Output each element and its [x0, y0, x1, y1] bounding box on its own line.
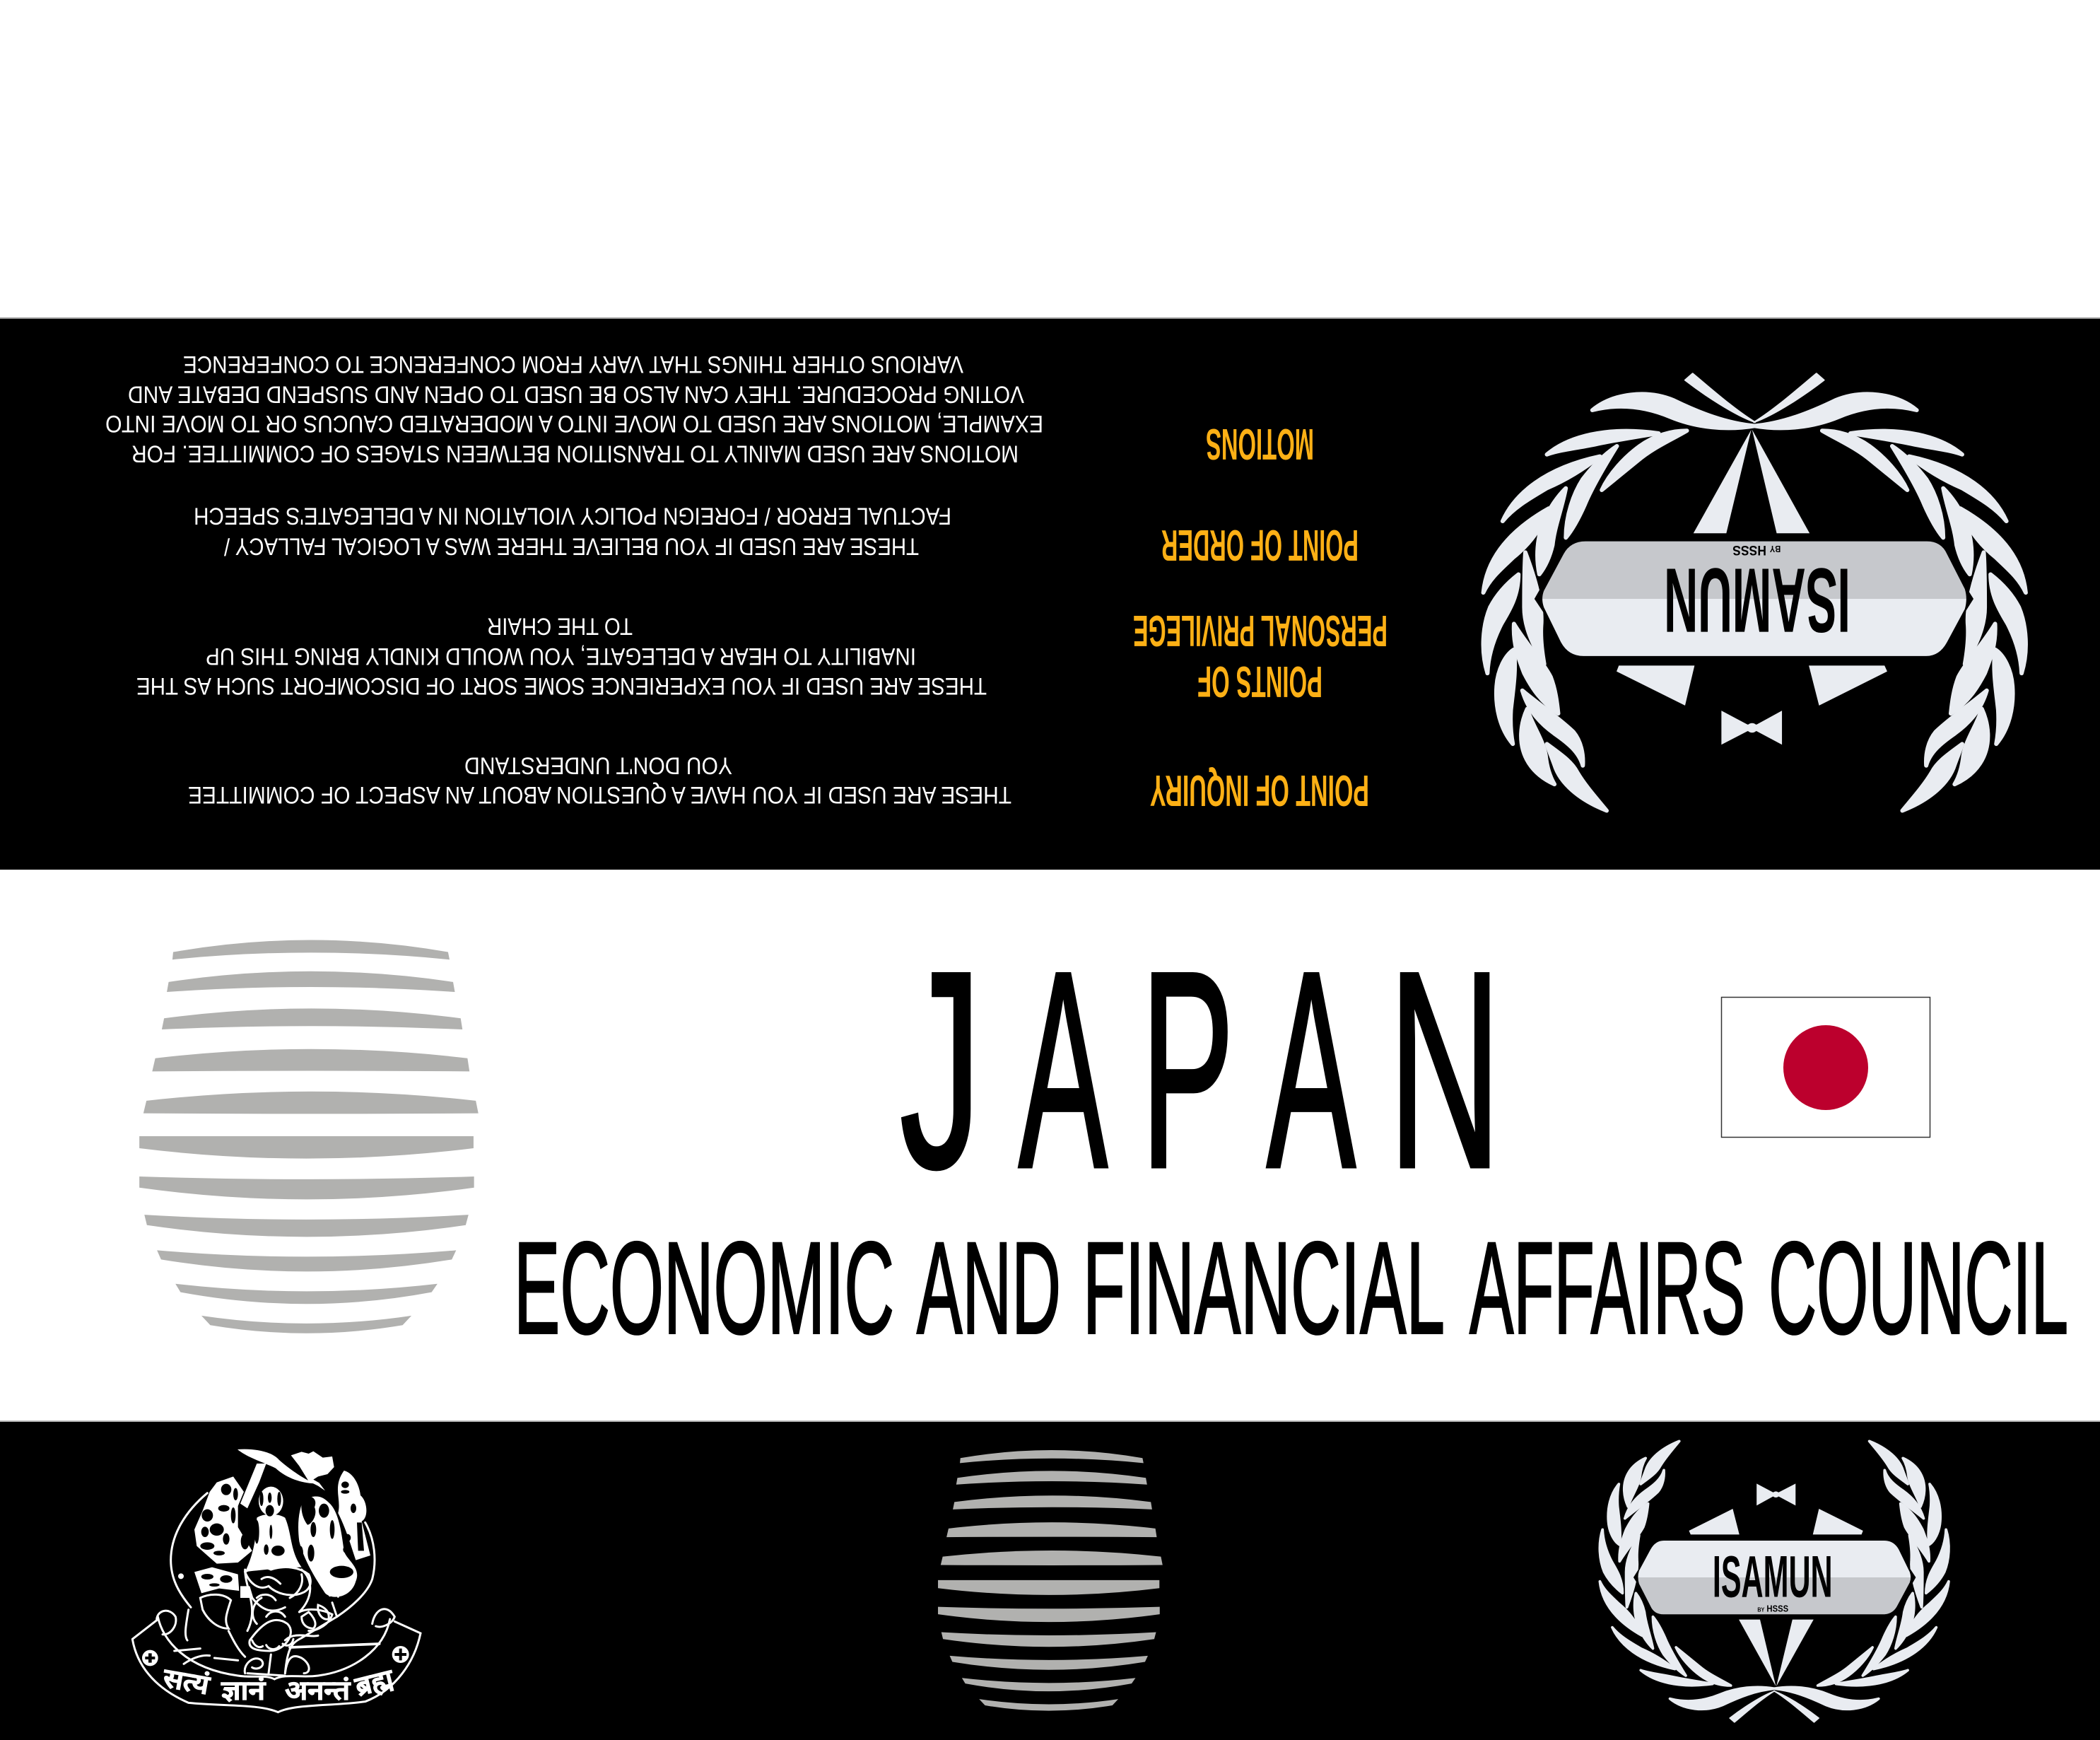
text: motions description: MOTIONS ARE USED MAINLY TO TRANSITION BETWEEN STAGES OF COMMITTEE. FOR: [131, 440, 1019, 467]
icon: UN stripes globe: [139, 940, 479, 1333]
icon: ISAMUN wreath logo: ISAMUN: [1713, 1543, 1833, 1609]
icon: ISAMUN wreath logo, upside down: [1483, 373, 2026, 811]
title: JAPAN: N: [1388, 913, 1501, 1226]
text: crest motto: [160, 1662, 397, 1705]
panel: footer logos band: [0, 1420, 2100, 1740]
text: point of order description: FACTUAL ERROR / FOREIGN POLICY VIOLATION IN A DELEGATE'S SPEECH: [194, 502, 951, 529]
text: personal privilege description: INABILITY TO HEAR A DELEGATE, YOU WOULD KINDLY BRING THIS UP: [206, 643, 916, 670]
icon: flag of Japan: [1722, 997, 1930, 1137]
icon: school crest: [132, 1449, 421, 1712]
text: motions description: VOTING PROCEDURE. THEY CAN ALSO BE USED TO OPEN AND SUSPEND DEBATE AND: [128, 380, 1024, 407]
text: personal privilege description: [136, 612, 987, 699]
heading: point of order: POINT OF ORDER: [1161, 520, 1359, 569]
heading: points of personal privilege: PERSONAL PRIVILEGE: [1133, 606, 1388, 655]
icon: ISAMUN wreath logo, upside down: ISAMUN: [1664, 549, 1850, 652]
heading: point of inquiry: POINT OF INQUIRY: [1150, 766, 1369, 814]
icon: UN stripes globe, small: [938, 1450, 1163, 1711]
text: point of order description: THESE ARE USED IF YOU BELIEVE THERE WAS A LOGICAL FALLACY /: [224, 533, 919, 560]
title: JAPAN: A: [1019, 913, 1108, 1226]
text: point of order description: [194, 502, 951, 560]
subtitle: committee name: [514, 1216, 2068, 1362]
heading: points of personal privilege: POINTS OF: [1197, 657, 1322, 706]
text: motions description: VARIOUS OTHER THINGS THAT VARY FROM CONFERENCE TO CONFERENCE: [183, 351, 963, 378]
text: point of inquiry description: [188, 752, 1011, 808]
icon: ISAMUN wreath logo, upside down: BY HSSS: [1732, 542, 1781, 558]
title: JAPAN: P: [1141, 913, 1234, 1226]
title: JAPAN: J: [900, 913, 982, 1226]
heading: points of personal privilege: [1133, 606, 1388, 706]
title: JAPAN: [900, 913, 1501, 1226]
icon: banner rosettes: [142, 1646, 409, 1666]
subtitle: committee name: AFFAIRS: [1470, 1216, 1745, 1362]
icon: ISAMUN wreath logo: BY HSSS: [1757, 1604, 1789, 1613]
subtitle: committee name: AND: [917, 1216, 1061, 1362]
panel: rules of procedure band (upside down): [0, 317, 2100, 870]
icon: ISAMUN wreath logo: [1600, 1441, 1949, 1722]
subtitle: committee name: FINANCIAL: [1083, 1216, 1445, 1362]
text: crest motto: अनन्तं: [285, 1675, 351, 1705]
text: personal privilege description: THESE ARE USED IF YOU EXPERIENCE SOME SORT OF DISCOMFORT SUCH AS THE: [136, 672, 987, 699]
text: motions description: [105, 351, 1043, 467]
panel: country and committee placard: [139, 913, 2068, 1362]
text: crest motto: सत्यं: [160, 1662, 213, 1700]
heading: motions: MOTIONS: [1206, 419, 1314, 468]
text: point of inquiry description: THESE ARE USED IF YOU HAVE A QUESTION ABOUT AN ASPECT OF COMMITTEE: [188, 781, 1011, 808]
text: motions description: EXAMPLE, MOTIONS ARE USED TO MOVE INTO A MODERATED CAUCUS OR TO MOVE INTO: [105, 410, 1043, 437]
subtitle: committee name: ECONOMIC: [514, 1216, 894, 1362]
text: point of inquiry description: YOU DON'T UNDERSTAND: [464, 752, 732, 779]
text: personal privilege description: TO THE CHAIR: [487, 612, 633, 639]
title: JAPAN: A: [1267, 913, 1356, 1226]
text: crest motto: ब्रह्म: [351, 1663, 397, 1701]
text: crest motto: ज्ञानं: [221, 1675, 266, 1705]
